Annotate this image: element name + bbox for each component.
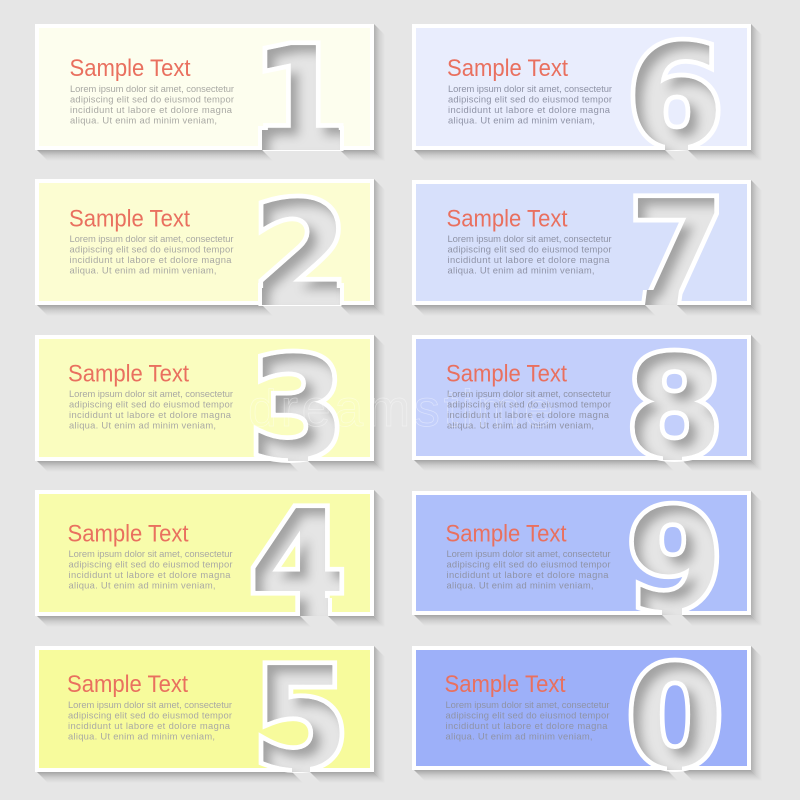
text block: card 4: incididunt ut labore et dolore magna xyxy=(68,569,231,580)
number 0: 0 xyxy=(627,637,723,798)
text block: card 0: Lorem ipsum dolor sit amet, consectetur xyxy=(446,699,610,710)
panel: card 4 xyxy=(35,481,385,642)
text block: card 0: aliqua. Ut enim ad minim veniam, xyxy=(446,730,592,742)
text block: card 5: incididunt ut labore et dolore magna xyxy=(68,720,231,731)
text block: card 6: aliqua. Ut enim ad minim veniam, xyxy=(448,114,595,126)
text block: card 0: incididunt ut labore et dolore magna xyxy=(446,720,608,731)
text block: card 1 xyxy=(70,83,234,126)
text block: card 4: aliqua. Ut enim ad minim veniam, xyxy=(68,580,216,590)
heading: card 4: Sample Text xyxy=(68,520,189,548)
text block: card 5: Lorem ipsum dolor sit amet, consectetur xyxy=(68,699,232,710)
panel: card 9 xyxy=(412,480,762,641)
text block: card 2: aliqua. Ut enim ad minim veniam, xyxy=(70,264,216,276)
number 0: 0 xyxy=(627,637,723,798)
watermark: dreamstime xyxy=(248,380,553,438)
text block: card 5: aliqua. Ut enim ad minim veniam, xyxy=(68,730,215,742)
number 2: 2 xyxy=(252,173,349,334)
text block: card 1: Lorem ipsum dolor sit amet, consectetur xyxy=(70,83,234,94)
heading: card 7: Sample Text xyxy=(446,206,568,232)
number 5: 5 xyxy=(253,638,349,799)
number 4: 4 xyxy=(249,481,346,642)
panel: card 0 xyxy=(412,637,762,798)
text block: card 2: Lorem ipsum dolor sit amet, consectetur xyxy=(70,233,234,244)
text block: card 5 xyxy=(68,699,232,742)
heading: card 3: Sample Text xyxy=(68,360,189,388)
text block: card 2: adipiscing elit sed do eiusmod tempor xyxy=(70,244,234,254)
number 2: 2 xyxy=(252,173,349,334)
number 6: 6 xyxy=(627,16,723,177)
text block: card 7 xyxy=(448,233,612,276)
text block: card 0 xyxy=(446,699,610,742)
text block: card 7: adipiscing elit sed do eiusmod tempor xyxy=(448,244,612,254)
text block: card 2: incididunt ut labore et dolore magna xyxy=(70,254,232,265)
heading: card 1: Sample Text xyxy=(70,55,191,82)
text block: card 4: Lorem ipsum dolor sit amet, consectetur xyxy=(68,548,232,559)
text block: card 3: adipiscing elit sed do eiusmod tempor xyxy=(69,398,233,410)
heading: card 0: Sample Text xyxy=(444,671,566,698)
number 7: 7 xyxy=(629,171,725,332)
text block: card 9: Lorem ipsum dolor sit amet, consectetur xyxy=(446,548,610,559)
panel: card 8 xyxy=(412,327,762,488)
heading: card 6: Sample Text xyxy=(447,55,568,82)
panel: card 6 xyxy=(412,16,762,177)
text block: card 1: incididunt ut labore et dolore magna xyxy=(70,104,233,115)
text block: card 3: aliqua. Ut enim ad minim veniam, xyxy=(69,420,216,430)
text block: card 9: adipiscing elit sed do eiusmod tempor xyxy=(446,558,610,570)
text block: card 7: Lorem ipsum dolor sit amet, consectetur xyxy=(448,233,612,244)
panel: card 5 xyxy=(35,638,385,799)
text block: card 8: adipiscing elit sed do eiusmod tempor xyxy=(447,398,611,410)
number 1: 1 xyxy=(252,18,348,179)
text block: card 1: aliqua. Ut enim ad minim veniam, xyxy=(70,114,217,126)
text block: card 9: incididunt ut labore et dolore magna xyxy=(446,569,609,580)
text block: card 8: aliqua. Ut enim ad minim veniam, xyxy=(447,420,594,430)
heading: card 9: Sample Text xyxy=(446,520,567,548)
number 9: 9 xyxy=(627,480,723,641)
number 8: 8 xyxy=(626,327,723,488)
panel: card 1 xyxy=(35,18,385,179)
number 6: 6 xyxy=(627,16,723,177)
text block: card 6: incididunt ut labore et dolore magna xyxy=(448,104,611,115)
text block: card 9: aliqua. Ut enim ad minim veniam, xyxy=(446,580,594,590)
text block: card 6: Lorem ipsum dolor sit amet, consectetur xyxy=(448,83,612,94)
panel: card 2 xyxy=(35,173,385,334)
text block: card 7: incididunt ut labore et dolore magna xyxy=(448,254,610,265)
panel: card 7 xyxy=(412,171,762,332)
text block: card 6 xyxy=(448,83,612,126)
number 9: 9 xyxy=(627,480,723,641)
panel: card 3 xyxy=(35,328,385,489)
text block: card 8 xyxy=(447,388,611,430)
heading: card 5: Sample Text xyxy=(67,671,188,698)
number 5: 5 xyxy=(253,638,349,799)
number 3: 3 xyxy=(249,328,346,489)
text block: card 8: incididunt ut labore et dolore magna xyxy=(447,409,610,420)
text block: card 3 xyxy=(69,388,233,430)
text block: card 4: adipiscing elit sed do eiusmod tempor xyxy=(68,558,232,570)
number 1: 1 xyxy=(252,18,348,179)
text block: card 6: adipiscing elit sed do eiusmod tempor xyxy=(448,94,612,104)
text block: card 8: Lorem ipsum dolor sit amet, consectetur xyxy=(447,388,611,399)
heading: card 2: Sample Text xyxy=(69,206,190,232)
text block: card 0: adipiscing elit sed do eiusmod tempor xyxy=(446,710,610,720)
number 3: 3 xyxy=(249,328,346,489)
number 8: 8 xyxy=(626,327,723,488)
text block: card 9 xyxy=(446,548,610,590)
text block: card 3: Lorem ipsum dolor sit amet, consectetur xyxy=(69,388,233,399)
text block: card 7: aliqua. Ut enim ad minim veniam, xyxy=(448,264,594,276)
text block: card 4 xyxy=(68,548,232,590)
heading: card 8: Sample Text xyxy=(446,360,567,388)
number 7: 7 xyxy=(629,171,725,332)
text block: card 3: incididunt ut labore et dolore magna xyxy=(69,409,232,420)
text block: card 5: adipiscing elit sed do eiusmod tempor xyxy=(68,710,232,720)
text block: card 1: adipiscing elit sed do eiusmod tempor xyxy=(70,94,234,104)
text block: card 2 xyxy=(70,233,234,276)
number 4: 4 xyxy=(249,481,346,642)
